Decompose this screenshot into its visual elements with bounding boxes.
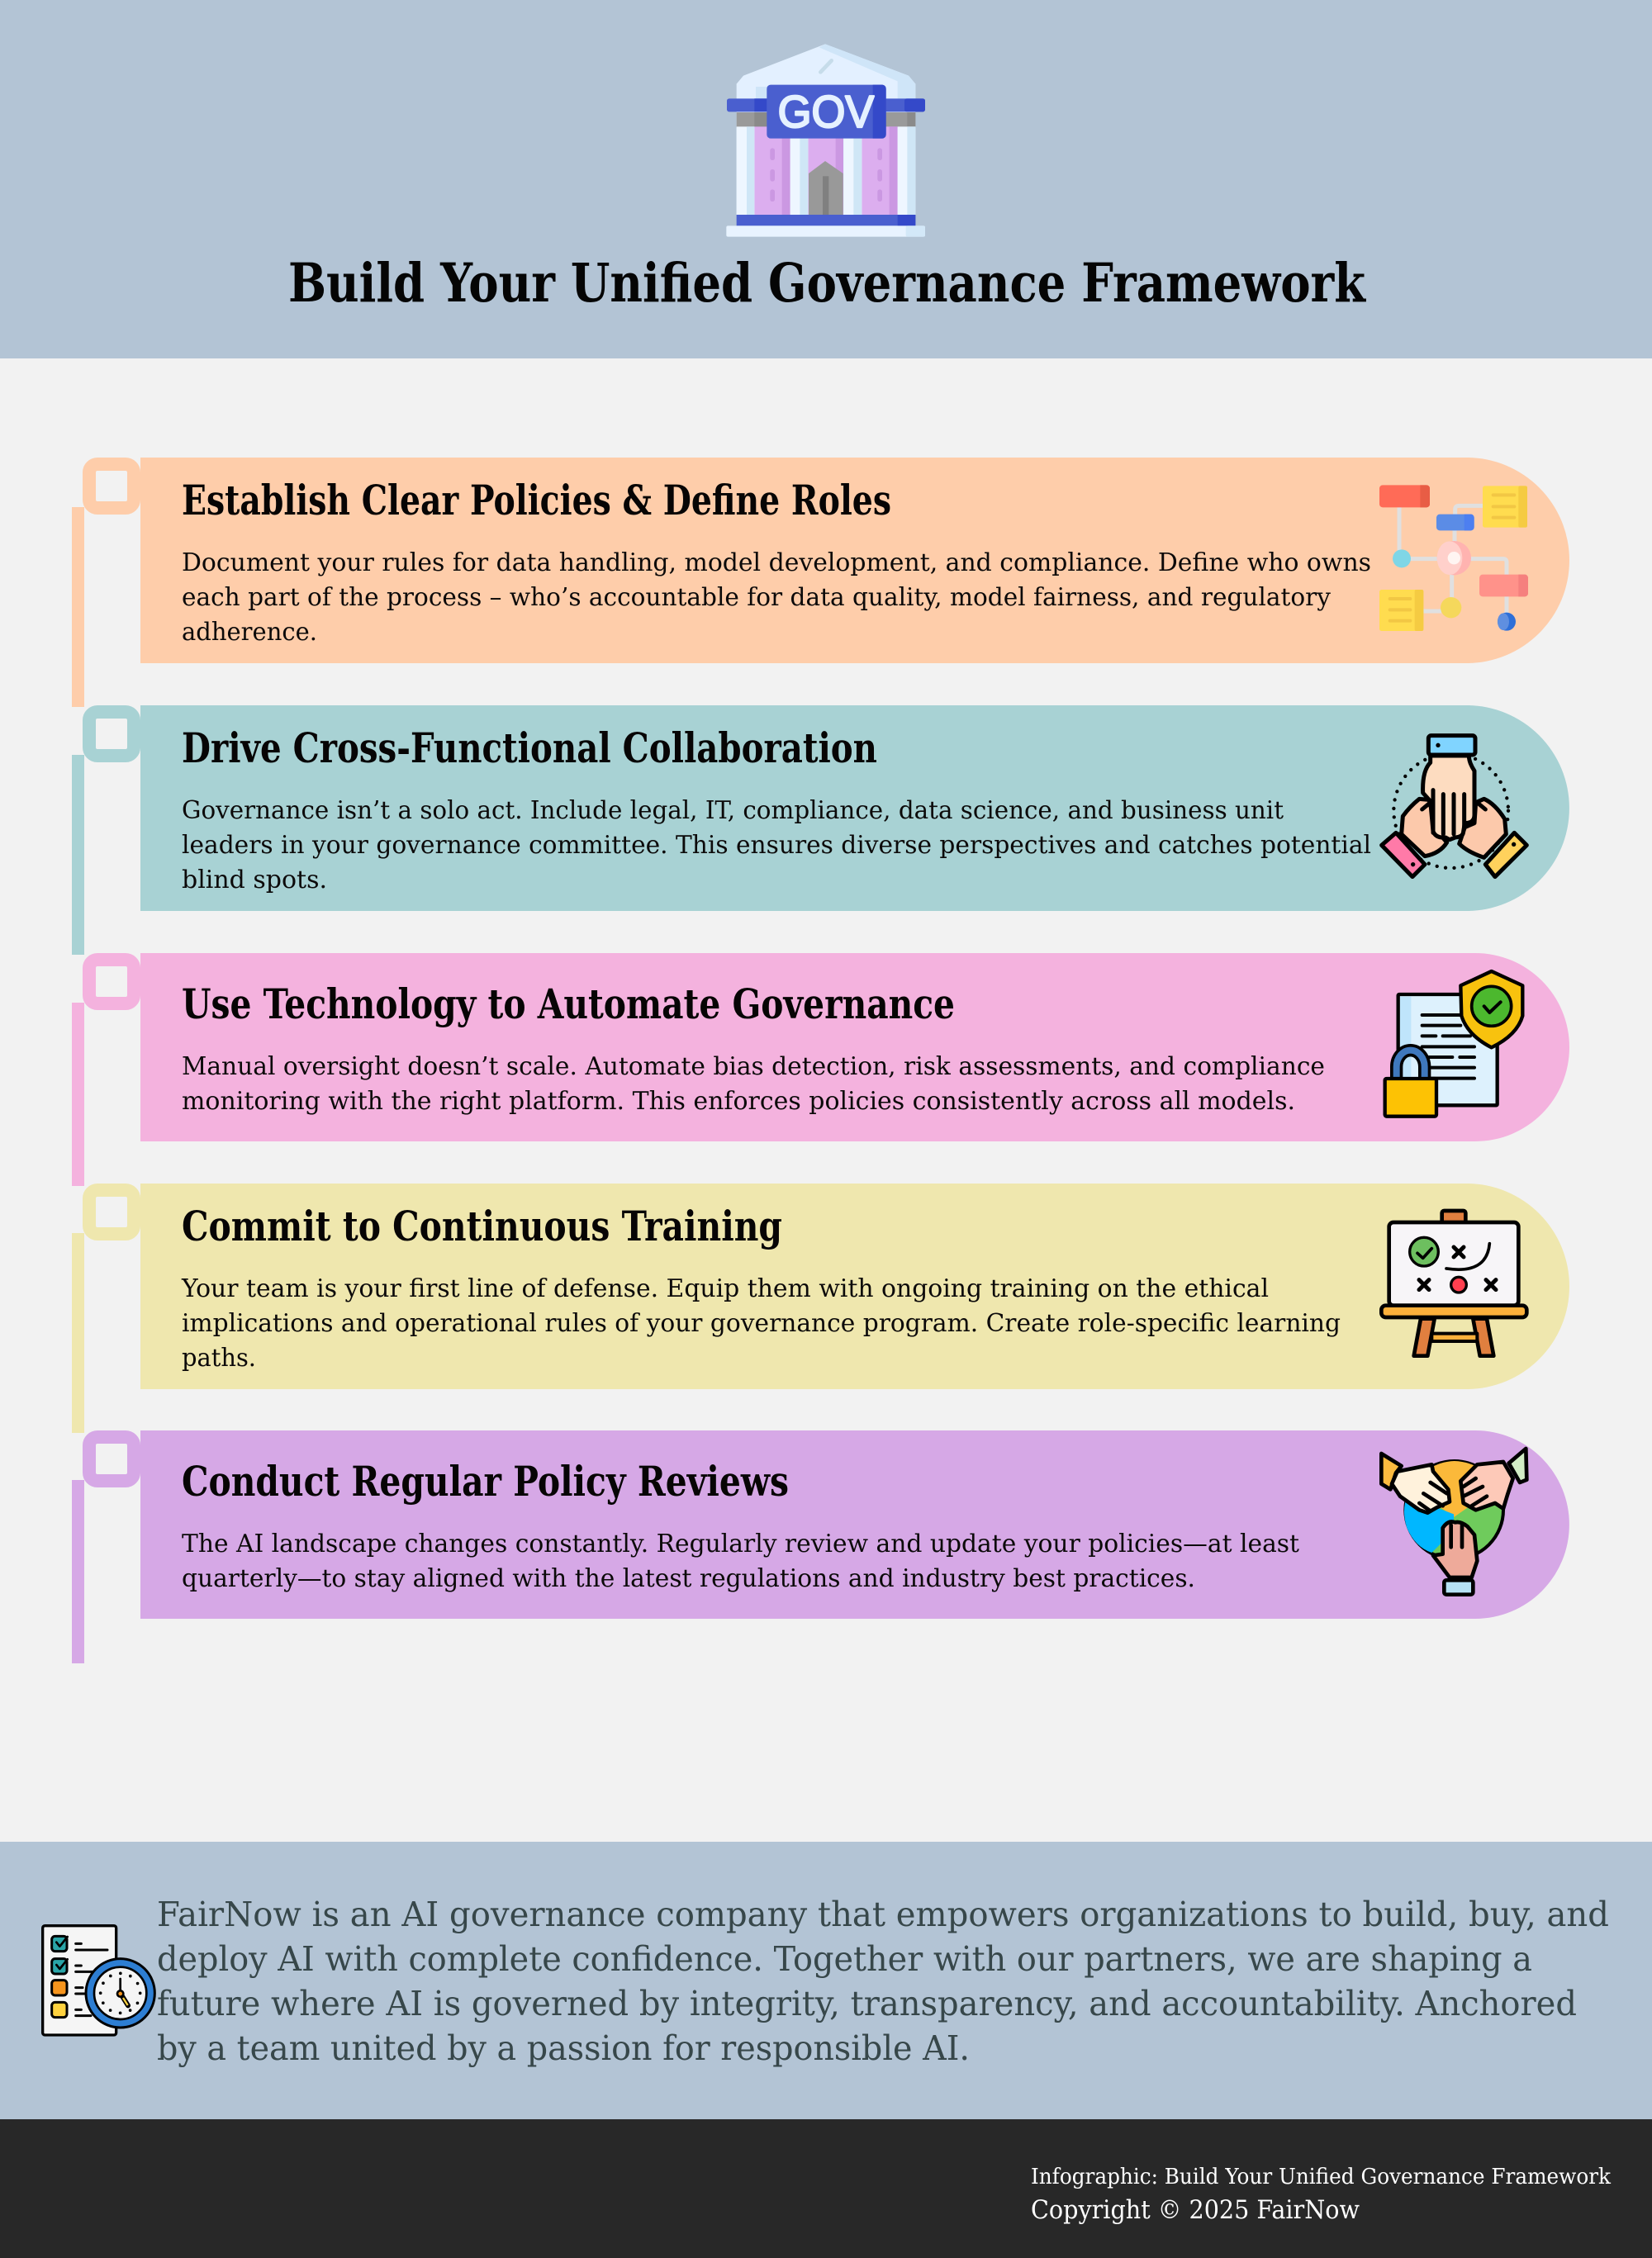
panel: step 3 automation: [72, 953, 1569, 1186]
about text: by a team united by a passion for responsible AI.: [157, 2028, 970, 2068]
heading: Commit to Continuous Training: [182, 1202, 782, 1250]
text block: Governance isn’t a solo act. Include legal, IT, compliance, data science, and business unit: [182, 796, 1284, 825]
icon: hands joined: [1382, 736, 1526, 877]
icon: hands over globe: [1381, 1449, 1526, 1595]
heading: Use Technology to Automate Governance: [182, 980, 955, 1028]
about text: [157, 1895, 1609, 2068]
panel: step 5 policy reviews: [72, 1430, 1569, 1663]
icon: process flow diagram: [1379, 485, 1528, 631]
text block: monitoring with the right platform. This enforces policies consistently across all models.: [182, 1087, 1295, 1116]
text block: Your team is your first line of defense. Equip them with ongoing training on the ethical: [181, 1274, 1269, 1303]
text block: Document your rules for data handling, model development, and compliance. Define who owns: [182, 548, 1371, 577]
about text: future where AI is governed by integrity, transparency, and accountability. Anchored: [157, 1984, 1577, 2023]
panel: step 1 policies and roles: [72, 458, 1569, 707]
text block: leaders in your governance committee. This ensures diverse perspectives and catches potential: [182, 831, 1371, 860]
icon: government building: [726, 44, 925, 237]
icon: secured document: [1385, 971, 1522, 1117]
heading: Conduct Regular Policy Reviews: [182, 1457, 789, 1506]
about band: [0, 1842, 1652, 2119]
footer band: [0, 2119, 1652, 2258]
heading: Drive Cross-Functional Collaboration: [182, 723, 877, 772]
text block: blind spots.: [182, 866, 327, 894]
title: Build Your Unified Governance Framework: [288, 252, 1367, 315]
text block: adherence.: [182, 618, 317, 647]
icon: checklist with clock: [43, 1926, 154, 2035]
text block: [182, 796, 1371, 894]
credit line: Infographic: Build Your Unified Governance Framework: [1031, 2165, 1611, 2189]
text block: Manual oversight doesn’t scale. Automate bias detection, risk assessments, and compliance: [182, 1052, 1325, 1081]
icon: strategy board on easel: [1381, 1211, 1526, 1356]
panel: step 4 training: [72, 1184, 1569, 1433]
panel: step 2 collaboration: [72, 705, 1569, 955]
text block: each part of the process – who’s accountable for data quality, model fairness, and regulatory: [182, 583, 1331, 612]
copyright: Copyright © 2025 FairNow: [1031, 2195, 1360, 2225]
text block: implications and operational rules of your governance program. Create role-specific learning: [182, 1309, 1341, 1338]
text block: [182, 1052, 1325, 1116]
text block: The AI landscape changes constantly. Regularly review and update your policies—at least: [182, 1530, 1299, 1558]
text block: [182, 1530, 1299, 1593]
text block: quarterly—to stay aligned with the latest regulations and industry best practices.: [182, 1564, 1195, 1593]
icon: government building: GOV: [778, 86, 875, 137]
heading: Establish Clear Policies & Define Roles: [182, 476, 891, 524]
about text: deploy AI with complete confidence. Together with our partners, we are shaping a: [157, 1939, 1532, 1979]
text block: [181, 1274, 1341, 1373]
text block: [182, 548, 1371, 647]
about text: FairNow is an AI governance company that empowers organizations to build, buy, and: [157, 1895, 1609, 1934]
text block: paths.: [182, 1344, 256, 1373]
header band: [0, 0, 1652, 358]
